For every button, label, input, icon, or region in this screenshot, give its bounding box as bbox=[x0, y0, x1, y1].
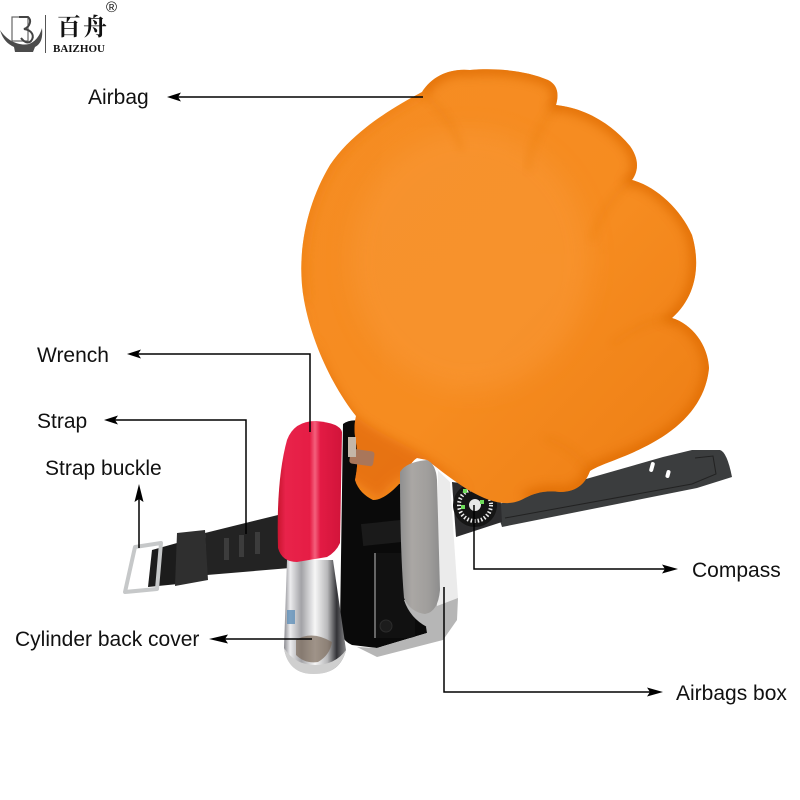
brass valve bbox=[348, 437, 375, 467]
icon: compass dial bbox=[453, 483, 497, 527]
label: Airbag: Airbag bbox=[88, 86, 149, 109]
arrow: Strap bbox=[104, 416, 246, 534]
arrow: Strap buckle bbox=[134, 484, 144, 548]
airbag bbox=[290, 60, 720, 510]
strap buckle bbox=[125, 543, 161, 592]
wrench bbox=[278, 421, 342, 562]
arrow: Compass bbox=[474, 505, 678, 574]
airbags box bbox=[357, 460, 458, 657]
label: Cylinder back cover bbox=[15, 628, 312, 651]
arrow: Airbag bbox=[167, 92, 423, 102]
box white face bbox=[427, 460, 458, 606]
label: Airbags box: Airbags box bbox=[676, 682, 787, 705]
logo wordmark: BAIZHOU bbox=[53, 43, 105, 55]
box lower silver band bbox=[357, 595, 458, 657]
logo: Baizhou bbox=[0, 0, 117, 55]
arrow: Cylinder back cover bbox=[209, 634, 312, 644]
logo characters: 百舟 bbox=[57, 7, 109, 42]
label: Strap bbox=[37, 410, 246, 534]
label: Compass: Compass bbox=[692, 559, 781, 582]
label: Airbags box bbox=[444, 587, 787, 705]
far strap with compass bbox=[452, 450, 732, 537]
label: Wrench: Wrench bbox=[37, 344, 109, 367]
label: Compass bbox=[474, 505, 781, 582]
near strap and buckle bbox=[125, 515, 290, 592]
arrow: Airbags box bbox=[444, 587, 663, 696]
label: Cylinder back cover: Cylinder back cover bbox=[15, 628, 199, 651]
logo emblem bbox=[0, 17, 42, 52]
arrow: Wrench bbox=[127, 350, 310, 432]
cylinder back cover bbox=[284, 560, 346, 674]
box metal panel bbox=[400, 460, 440, 614]
label: Wrench bbox=[37, 344, 310, 432]
label: Strap: Strap bbox=[37, 410, 87, 433]
label: Airbag bbox=[88, 86, 423, 109]
label: Strap buckle: Strap buckle bbox=[45, 457, 162, 480]
label: Strap buckle bbox=[45, 457, 162, 548]
open airbag box tray bbox=[340, 420, 427, 648]
